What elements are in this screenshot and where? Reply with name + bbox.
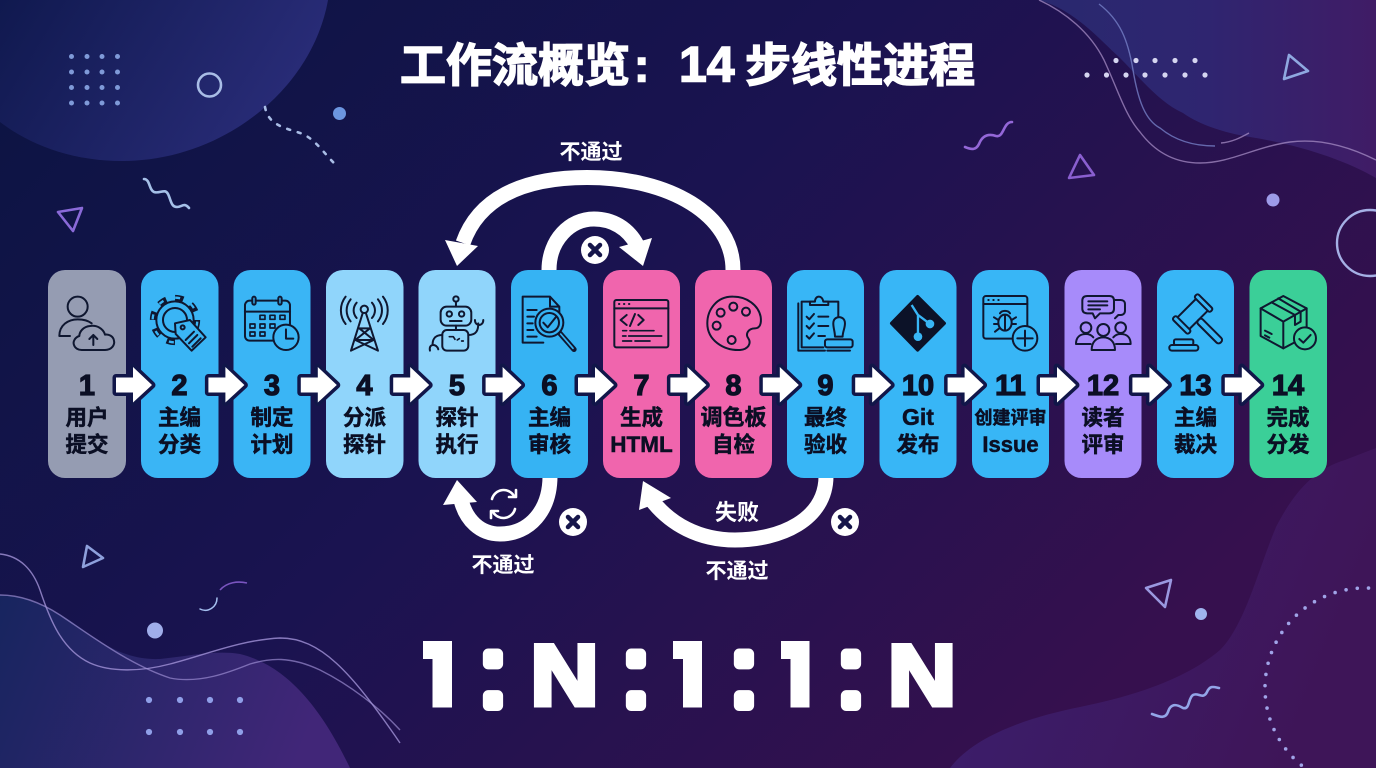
step 6 card: 6 [541, 370, 558, 402]
ratio text: : [731, 618, 757, 726]
ratio text: 1 [656, 628, 723, 724]
label: not passed (bottom left): 不通过 [472, 554, 534, 577]
label: not passed (top): 不通过 [560, 141, 622, 164]
step 12 card [1064, 270, 1142, 478]
arrow: step 1 to 2 [116, 367, 152, 402]
icon: delivered box [1261, 296, 1316, 349]
step 14 card: 完成 [1266, 405, 1310, 430]
step 7 card: 生成 [620, 406, 663, 430]
title: 工作流概览 [400, 40, 630, 92]
step 2 card: 主编 [158, 406, 201, 430]
step 4 card: 4 [356, 370, 373, 402]
arrow: step 13 to 14 [1225, 367, 1261, 402]
arrow: step 10 to 11 [948, 367, 984, 402]
step 12 card: 评审 [1081, 432, 1125, 457]
loop arrow: step 6 forward to step 7 [549, 219, 652, 270]
step 13 card: 主编 [1174, 406, 1217, 430]
step 3 card: 计划 [250, 433, 294, 457]
step 10 card: Git [902, 404, 934, 430]
step 6 card: 主编 [528, 406, 571, 430]
step 13 card [1157, 270, 1234, 478]
loop arrow: step 6 back to step 5 [443, 476, 550, 534]
step 7 card: HTML [610, 432, 673, 457]
arrow: step 5 to 6 [486, 367, 522, 402]
step 2 card: 2 [171, 370, 188, 402]
blob: bottom left [0, 595, 350, 768]
arrow: step 8 to 9 [763, 367, 799, 402]
step 10 card: 10 [902, 370, 934, 402]
icon: bug report window [983, 296, 1037, 351]
icon: document review [523, 297, 574, 349]
arrow: step 2 to 3 [208, 367, 244, 402]
icon: checklist and stamp [798, 297, 853, 351]
blob: bottom right [950, 448, 1376, 768]
arrow: step 6 to 7 [578, 367, 614, 402]
arrow: step 7 to 8 [670, 367, 706, 402]
step 9 card: 验收 [804, 432, 847, 457]
step 10 card: 发布 [896, 433, 940, 457]
step 7 card [603, 270, 680, 478]
step 2 card: 分类 [158, 433, 201, 457]
arrow: step 11 to 12 [1040, 367, 1076, 402]
step 8 card [695, 270, 772, 478]
ratio text: N [530, 628, 599, 724]
step 3 card: 制定 [250, 405, 294, 430]
step 2 card [141, 270, 218, 478]
icon: git logo [892, 297, 944, 350]
blob: top right [1039, 0, 1376, 178]
step 11 card: 创建评审 [974, 407, 1046, 428]
step 6 card [511, 270, 588, 478]
label: not passed (bottom right): 不通过 [706, 560, 768, 583]
step 3 card [234, 270, 310, 478]
step 10 card [880, 270, 956, 478]
step 5 card [418, 270, 496, 478]
step 11 card: 11 [995, 370, 1026, 402]
icon: refresh [491, 490, 516, 518]
icon: code window [614, 300, 668, 347]
icon: reader group [1076, 296, 1131, 350]
icon: calendar and clock [245, 297, 299, 350]
ratio text: : [838, 618, 864, 726]
step 14 card [1250, 270, 1327, 478]
ratio text [423, 641, 953, 711]
step 11 card: Issue [982, 432, 1039, 457]
arrow: step 12 to 13 [1132, 367, 1168, 402]
icon: palette [707, 297, 761, 350]
step 4 card [326, 270, 404, 478]
icon: reject mark right [831, 508, 859, 536]
blob: top left [0, 0, 328, 161]
step 9 card: 最终 [804, 406, 847, 430]
step 3 card: 3 [264, 370, 280, 402]
step 14 card: 分发 [1266, 433, 1310, 457]
step 5 card: 5 [449, 370, 465, 402]
arrow: step 9 to 10 [855, 367, 891, 402]
ratio text: : [480, 618, 506, 726]
step 5 card: 探针 [435, 406, 479, 430]
step 4 card: 探针 [343, 433, 386, 457]
step 12 card: 12 [1087, 370, 1119, 402]
step 1 card: 1 [79, 370, 95, 402]
step 9 card: 9 [817, 370, 834, 402]
ratio text: : [623, 618, 649, 726]
ratio text: 1 [406, 628, 473, 724]
step 1 card [48, 270, 126, 478]
step 8 card: 调色板 [700, 405, 767, 430]
step 5 card: 执行 [435, 433, 479, 457]
icon: reject mark top [581, 236, 609, 264]
title: : [634, 40, 649, 92]
ratio text: 1 [764, 628, 831, 724]
icon: gear with tag [153, 298, 206, 351]
icon: gavel [1169, 293, 1234, 355]
step 8 card: 8 [725, 370, 742, 402]
loop arrow: step 9 back to step 7 [639, 476, 826, 540]
icon: signal tower [341, 297, 388, 351]
step 4 card: 分派 [343, 406, 386, 430]
step 13 card: 13 [1179, 370, 1212, 402]
step 12 card: 读者 [1081, 406, 1125, 430]
title: 14 [679, 36, 735, 92]
step 6 card: 审核 [528, 432, 571, 457]
step 7 card: 7 [633, 370, 650, 402]
icon: robot [430, 296, 483, 351]
step 13 card: 裁决 [1174, 433, 1217, 457]
label: failed: 失败 [715, 500, 759, 525]
title: 步线性进程 [745, 40, 975, 92]
step 1 card: 提交 [65, 432, 109, 457]
loop arrow: step 8 back to step 5 [445, 178, 733, 270]
step 1 card: 用户 [65, 406, 109, 430]
arrow: step 4 to 5 [393, 367, 429, 402]
icon: user upload [59, 297, 114, 350]
ratio text: N [888, 628, 956, 724]
icon: reject mark left [559, 508, 587, 536]
step 11 card [972, 270, 1049, 478]
step 9 card [787, 270, 864, 478]
step 14 card: 14 [1272, 370, 1304, 402]
arrow: step 3 to 4 [301, 367, 337, 402]
step 8 card: 自检 [712, 432, 755, 457]
